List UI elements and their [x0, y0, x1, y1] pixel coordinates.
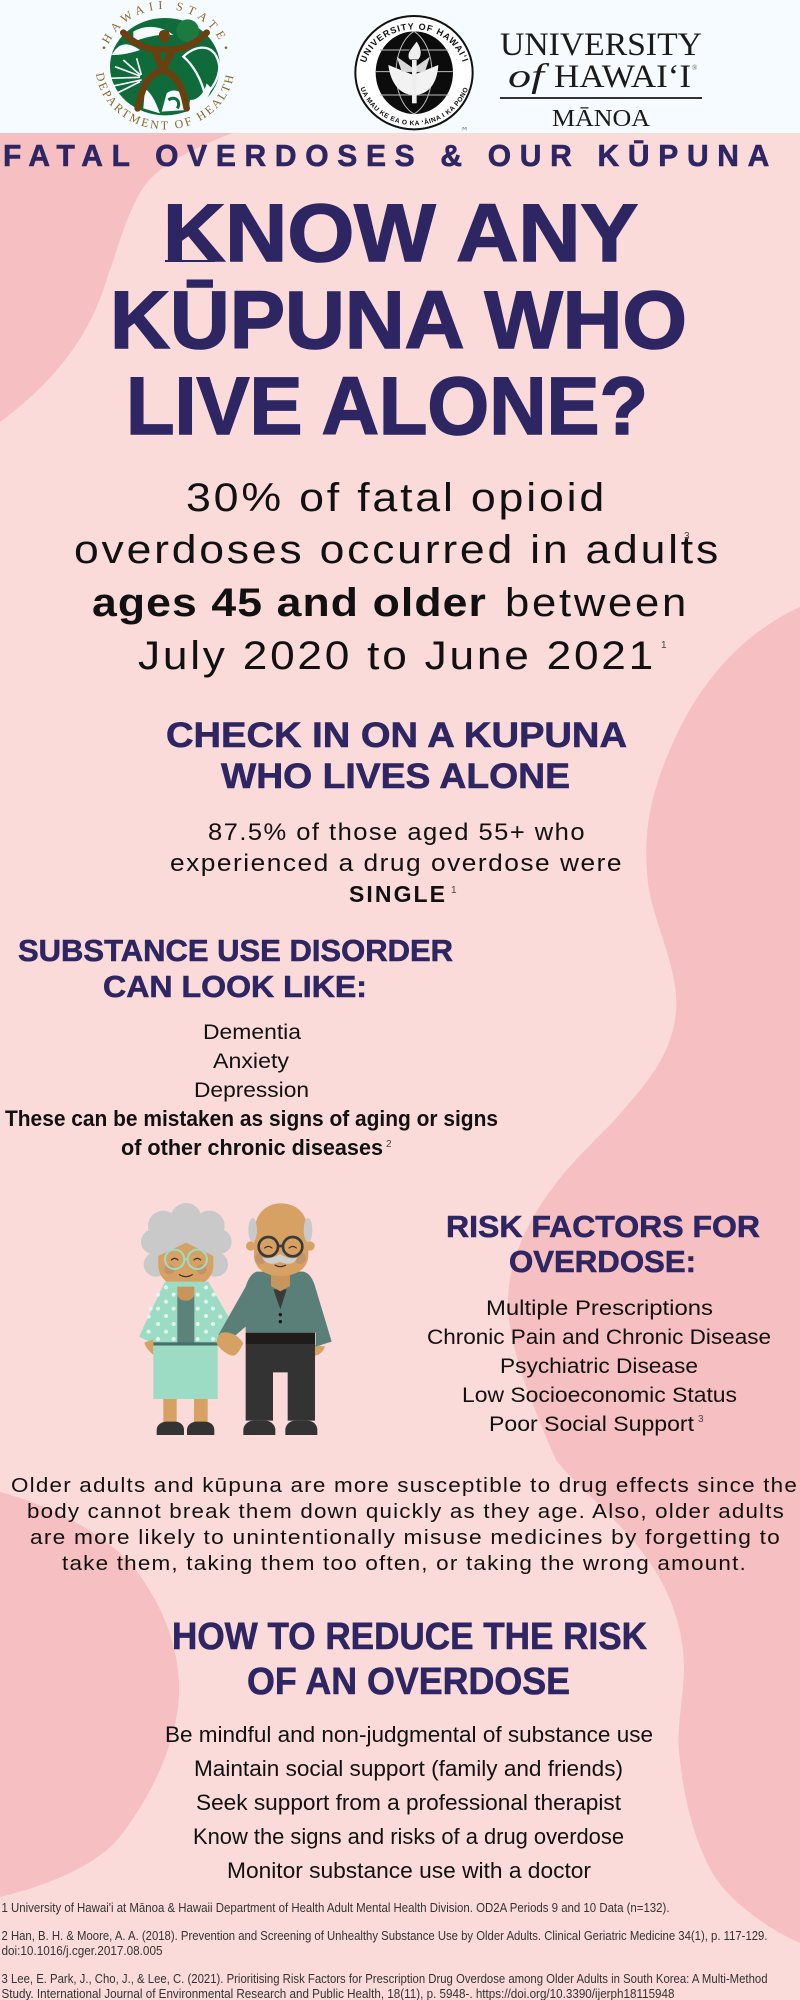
illustration: elderly couple holding hands: [139, 1203, 332, 1435]
section heading: how to reduce the risk: HOW TO REDUCE THE RISK: [172, 1616, 648, 1658]
explanatory paragraph: are more likely to unintentionally misuse medicines by forgetting to: [30, 1526, 781, 1549]
main title: [110, 188, 687, 452]
statistic: 30 percent of fatal opioid overdoses: 1: [661, 640, 667, 651]
explanatory paragraph: Older adults and kūpuna are more susceptible to drug effects since the: [11, 1474, 798, 1497]
section heading: how to reduce the risk: OF AN OVERDOSE: [247, 1661, 570, 1703]
logo: University of Hawaii Manoa wordmark: UNIVERSITY: [500, 27, 702, 63]
list: substance use disorder signs: Dementia: [203, 1020, 301, 1044]
section heading: substance use disorder: CAN LOOK LIKE:: [103, 969, 367, 1004]
logo: Hawaii State Department of Health: DEPARTMENT OF HEALTH: [96, 72, 234, 130]
list: risk factors: Poor Social Support: [489, 1412, 694, 1436]
list: substance use disorder signs: of other chronic diseases: [121, 1135, 383, 1160]
logo: University of Hawaii seal: UNIVERSITY OF HAWAI‘I: [360, 23, 468, 62]
statistic: 87.5 percent single: [170, 819, 623, 907]
list: substance use disorder signs: Anxiety: [213, 1049, 289, 1073]
section heading: check in on a kupuna: WHO LIVES ALONE: [221, 757, 570, 796]
list: how to reduce the risk: Maintain social support (family and friends): [194, 1756, 623, 1781]
explanatory paragraph: take them, taking them too often, or taking the wrong amount.: [62, 1552, 747, 1575]
logo: Hawaii State Department of Health: [96, 1, 234, 130]
section heading: risk factors for overdose: OVERDOSE:: [509, 1244, 696, 1279]
list: how to reduce the risk: Seek support from a professional therapist: [196, 1790, 622, 1815]
woman: [139, 1203, 232, 1435]
list: risk factors: Chronic Pain and Chronic Disease: [427, 1325, 771, 1349]
explanatory paragraph: body cannot break them down quickly as they age. Also, older adults: [27, 1500, 785, 1523]
man: [217, 1203, 332, 1435]
logo: University of Hawaii Manoa wordmark: [500, 27, 702, 132]
list: how to reduce the risk: Monitor substance use with a doctor: [227, 1858, 592, 1883]
statistic: 87.5 percent single: 1: [451, 885, 457, 896]
section heading: substance use disorder: SUBSTANCE USE DISORDER: [18, 933, 453, 968]
list: how to reduce the risk: Know the signs and risks of a drug overdose: [193, 1824, 624, 1849]
section heading: how to reduce the risk: [172, 1616, 648, 1703]
list: risk factors: Low Socioeconomic Status: [462, 1383, 737, 1407]
list: risk factors: Multiple Prescriptions: [486, 1296, 713, 1320]
statistic: 87.5 percent single: SINGLE: [349, 881, 445, 907]
background blob: bottom left: [0, 1492, 179, 1897]
list: risk factors: [427, 1296, 771, 1436]
list: risk factors: 3: [698, 1414, 704, 1425]
list: substance use disorder signs: Depression: [194, 1078, 309, 1102]
logo: University of Hawaii seal: [354, 15, 474, 130]
background blob: right wave: [508, 607, 800, 1943]
list: substance use disorder signs: [5, 1020, 498, 1160]
logo: University of Hawaii Manoa wordmark: of: [508, 58, 550, 95]
section heading: substance use disorder: [18, 933, 453, 1004]
Hawaiian figure: [123, 33, 207, 108]
list: substance use disorder signs: 2: [386, 1139, 392, 1150]
statistic: 30 percent of fatal opioid overdoses: overdoses occurred in adults: [74, 528, 721, 572]
main title: LIVE ALONE?: [126, 361, 648, 452]
statistic: 30 percent of fatal opioid overdoses: [74, 476, 721, 678]
background blob: top left: [0, 133, 232, 422]
statistic: 30 percent of fatal opioid overdoses: 3: [684, 531, 690, 542]
section heading: check in on a kupuna: [166, 716, 627, 796]
statistic: 30 percent of fatal opioid overdoses: ages 45 and older: [92, 581, 487, 625]
section heading: check in on a kupuna: CHECK IN ON A KUPUNA: [166, 716, 627, 755]
list: substance use disorder signs: These can be mistaken as signs of aging or signs: [5, 1106, 498, 1131]
list: risk factors: Psychiatric Disease: [500, 1354, 698, 1378]
statistic: 30 percent of fatal opioid overdoses: 30% of fatal opioid: [186, 476, 607, 520]
list: how to reduce the risk: [165, 1722, 653, 1883]
references: doi:10.1016/j.cger.2017.08.005: [2, 1944, 163, 1958]
statistic: 30 percent of fatal opioid overdoses: between: [505, 581, 689, 625]
logo: University of Hawaii seal: (M): [462, 126, 467, 130]
statistic: 87.5 percent single: 87.5% of those aged 55+ who: [208, 819, 586, 846]
logo: University of Hawaii Manoa wordmark: ®: [692, 64, 698, 72]
section heading: risk factors for overdose: [446, 1209, 760, 1279]
logo: University of Hawaii Manoa wordmark: HAWAI‘I: [554, 59, 691, 95]
statistic: 30 percent of fatal opioid overdoses: July 2020 to June 2021: [138, 634, 656, 678]
references: 1 University of Hawai'i at Mānoa & Hawaii Department of Health Adult Mental Health Division. OD2A Periods 9 and 10 Data (n=132).: [2, 1901, 670, 1915]
main title: KNOW ANY: [163, 188, 638, 279]
logo: University of Hawaii seal: UA MAU KE EA O KA ‘ĀINA I KA PONO: [360, 86, 468, 126]
banner heading: FATAL OVERDOSES & OUR KŪPUNA: [3, 138, 778, 173]
logo: University of Hawaii Manoa wordmark: MĀNOA: [552, 106, 651, 132]
header logo band: [0, 0, 800, 133]
statistic: 87.5 percent single: experienced a drug overdose were: [170, 850, 623, 877]
section heading: risk factors for overdose: RISK FACTORS FOR: [446, 1209, 760, 1244]
explanatory paragraph: [11, 1474, 798, 1575]
references: [2, 1901, 768, 2000]
main title: KŪPUNA WHO: [110, 275, 687, 366]
list: how to reduce the risk: Be mindful and non-judgmental of substance use: [165, 1722, 653, 1747]
